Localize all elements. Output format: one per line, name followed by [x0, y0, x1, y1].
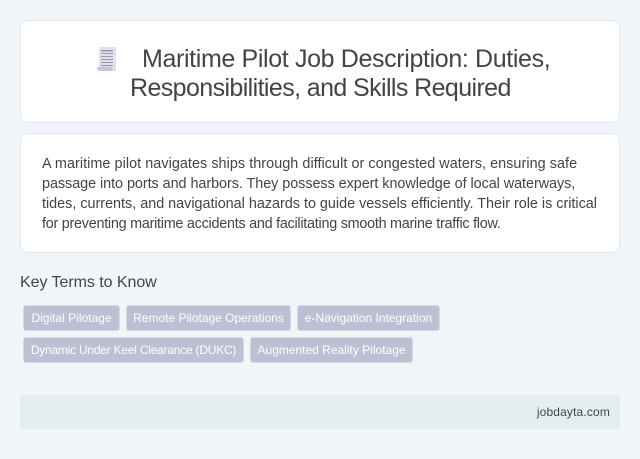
tag: Digital Pilotage [31, 311, 112, 325]
tag: Augmented Reality Pilotage [257, 343, 406, 357]
description text: A maritime pilot navigates ships through difficult or congested waters, ensuring safe [42, 156, 577, 172]
tag [23, 337, 244, 363]
footer source text: jobdayta.com [537, 405, 610, 419]
tag: Dynamic Under Keel Clearance (DUKC) [31, 343, 236, 357]
tag: e-Navigation Integration [305, 311, 432, 325]
icon: paper scroll [97, 47, 116, 71]
title [130, 45, 550, 102]
tag [126, 305, 291, 331]
description text: passage into ports and harbors. They possess expert knowledge of local waterways, [42, 176, 575, 192]
tag [23, 305, 120, 331]
description text: for preventing maritime accidents and facilitating smooth marine traffic flow. [42, 216, 501, 232]
tag [250, 337, 413, 363]
title: Responsibilities, and Skills Required [130, 74, 511, 102]
heading: key terms: Key Terms to Know [20, 274, 157, 291]
description text: tides, currents, and navigational hazards to guide vessels efficiently. Their role is critical [42, 196, 597, 212]
title: Maritime Pilot Job Description: Duties, [142, 45, 550, 73]
tag [297, 305, 440, 331]
panel: description card [20, 133, 620, 253]
panel: title card [20, 20, 620, 123]
description text [42, 156, 597, 232]
tag: Remote Pilotage Operations [133, 311, 284, 325]
footer bar [20, 395, 620, 429]
